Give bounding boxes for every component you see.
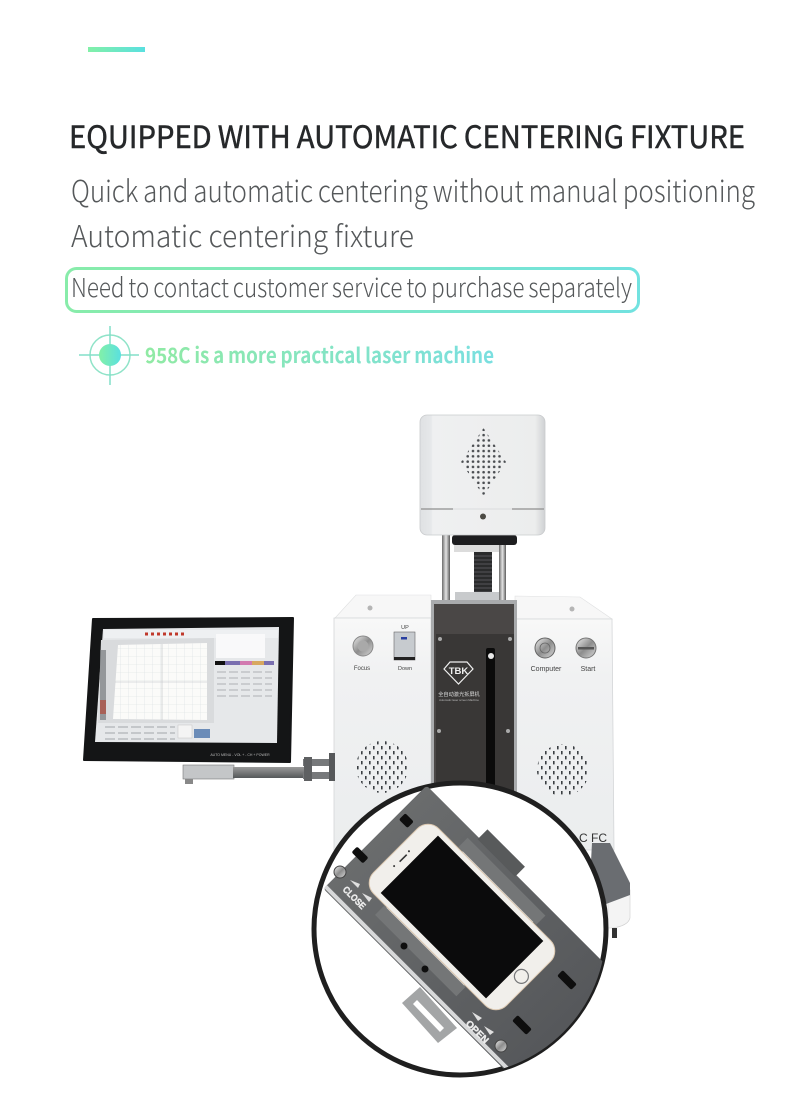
fixture direction arrows: [350, 880, 494, 1035]
fixture label: open: OPEN: [463, 1018, 491, 1046]
lifting column with rods and spring: [442, 530, 517, 601]
fixture screws: [334, 866, 507, 1052]
smartphone: [368, 824, 556, 1010]
centre control panel: Automatic laser screen Machine: [439, 698, 479, 702]
fixture tab with slot: [402, 987, 457, 1043]
fixture plate: [324, 786, 602, 1068]
monitor arm: [183, 753, 335, 784]
accent bar: [88, 47, 145, 52]
fixture slots: [352, 813, 577, 1035]
subtitle line 2: Automatic centering fixture: [71, 212, 414, 256]
zoom circle: centering fixture close-up: [312, 780, 608, 1078]
machine illustration: [84, 415, 630, 938]
monitor: AUTO MENU - VOL + - CH + POWER: [210, 753, 270, 757]
centre control panel: TBK: [449, 666, 468, 677]
left cabinet: UP: [401, 625, 409, 631]
right cabinet: Computer: [531, 666, 562, 673]
laser head: [420, 415, 545, 535]
right cabinet: C FC: [579, 831, 607, 845]
tagline: 958C is a more practical laser machine: [145, 340, 494, 370]
callout: purchase note: Need to contact customer service to purchase separately: [71, 268, 632, 305]
title: EQUIPPED WITH AUTOMATIC CENTERING FIXTURE: [69, 112, 745, 157]
centre control panel: 全自动激光拆屏机: [438, 690, 481, 698]
right cabinet: [515, 596, 614, 850]
fixture label: close: CLOSE: [340, 884, 368, 912]
left cabinet: Down: [398, 666, 412, 672]
right cabinet: Start: [581, 666, 595, 673]
centre control panel: [431, 600, 517, 850]
icon: target crosshair: [79, 326, 139, 385]
left cabinet: [334, 595, 431, 850]
side handle: [590, 843, 630, 938]
monitor: [84, 618, 293, 762]
left cabinet: Focus: [354, 666, 370, 672]
